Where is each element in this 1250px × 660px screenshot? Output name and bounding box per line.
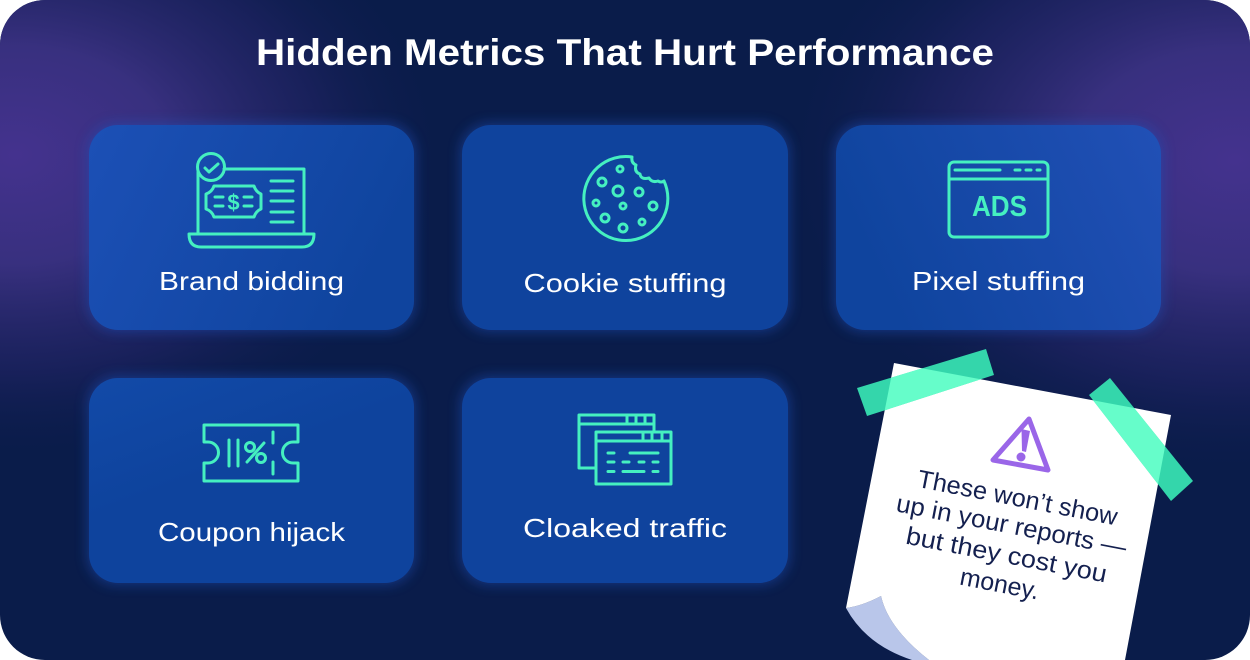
tape: right — [1089, 378, 1193, 501]
title: Hidden Metrics That Hurt Performance — [256, 32, 994, 73]
sticky note callout — [846, 349, 1193, 660]
icon: laptop with dollar ticket: $ — [227, 190, 240, 215]
curled corner — [846, 596, 929, 660]
panel: pixel stuffing — [834, 123, 1163, 332]
note text: but they cost you — [904, 522, 1109, 588]
label: Coupon hijack — [158, 517, 346, 547]
icon: ads browser window — [949, 162, 1048, 237]
label: Pixel stuffing — [912, 266, 1085, 296]
panel: cloaked traffic — [460, 376, 790, 585]
panel: brand bidding — [87, 123, 416, 332]
panel: coupon hijack — [87, 376, 416, 585]
label: Cloaked traffic — [523, 513, 727, 543]
icon: coupon ticket — [204, 425, 298, 481]
panel: cookie stuffing — [460, 123, 790, 332]
note text — [894, 465, 1129, 606]
note text: money. — [958, 563, 1041, 606]
icon: cookie — [584, 157, 668, 241]
label: Cookie stuffing — [524, 268, 726, 298]
note paper — [846, 363, 1171, 660]
icon: laptop with dollar ticket — [189, 154, 314, 247]
label: Brand bidding — [159, 266, 344, 296]
note text: up in your reports — — [894, 490, 1129, 562]
icon: ads browser window: ADS — [972, 191, 1027, 223]
note text: These won’t show — [915, 465, 1121, 531]
icon: warning triangle — [993, 419, 1048, 470]
icon: layered browser windows — [579, 415, 671, 484]
tape: left — [857, 349, 994, 416]
